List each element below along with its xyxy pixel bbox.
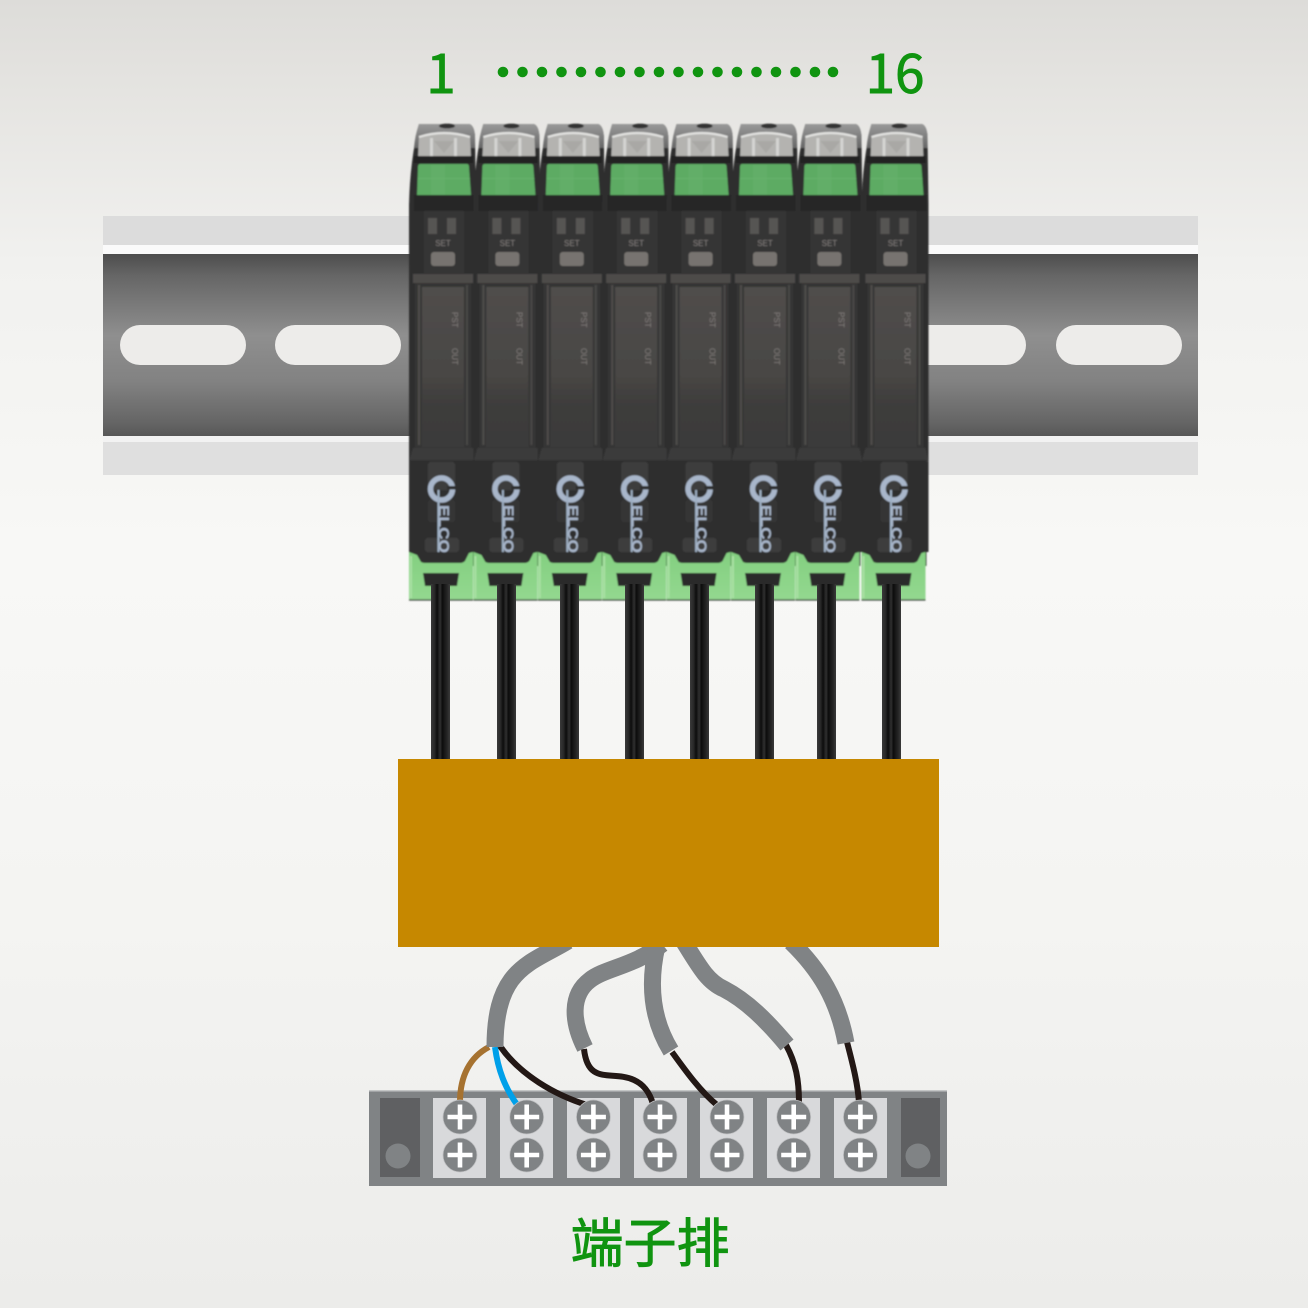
module 6: ELCO bbox=[757, 505, 774, 553]
module 8: PST bbox=[902, 312, 912, 328]
module 6: OUT bbox=[772, 348, 781, 365]
module 5: OUT bbox=[708, 348, 717, 365]
module 5 bbox=[667, 124, 734, 600]
module 7: OUT bbox=[836, 348, 845, 365]
rail slot 4 bbox=[1056, 325, 1182, 365]
caption: terminal block: 端子排 bbox=[570, 1202, 730, 1278]
module 5: PST bbox=[708, 312, 717, 328]
dotted range line bbox=[498, 67, 838, 77]
grey cable 5 bbox=[791, 942, 846, 1043]
brown wire bbox=[460, 1047, 489, 1102]
rail slot 3 bbox=[900, 325, 1026, 365]
module 7: ELCO bbox=[821, 505, 838, 553]
blue wire bbox=[495, 1047, 518, 1106]
DIN rail bbox=[103, 216, 1198, 475]
module 4: SET bbox=[628, 239, 644, 248]
black wire 5 bbox=[847, 1042, 859, 1103]
module 2: SET bbox=[500, 239, 515, 248]
module 1 bbox=[409, 124, 476, 600]
module 2: PST bbox=[514, 312, 523, 328]
label: module 1: 1 bbox=[426, 33, 456, 109]
black wire 1 bbox=[500, 1046, 587, 1105]
grey cable 2 bbox=[575, 944, 662, 1048]
module 2: OUT bbox=[514, 348, 523, 365]
module 3: ELCO bbox=[564, 505, 581, 553]
module 1: ELCO bbox=[435, 505, 452, 553]
module 7 bbox=[795, 124, 862, 600]
wires bbox=[460, 1042, 859, 1106]
module 4: PST bbox=[643, 312, 652, 328]
module 3: PST bbox=[579, 312, 588, 328]
module 3: OUT bbox=[579, 348, 588, 365]
module 7: SET bbox=[822, 239, 837, 248]
left end cap bbox=[380, 1098, 420, 1177]
module 1: OUT bbox=[450, 348, 459, 365]
rail slot 1 bbox=[120, 325, 246, 365]
module 6: PST bbox=[772, 312, 781, 328]
module 8 bbox=[862, 124, 928, 600]
module 6 bbox=[731, 124, 798, 600]
grey cables bbox=[495, 941, 846, 1051]
grey cable 3 bbox=[652, 946, 671, 1051]
module 2 bbox=[473, 124, 540, 600]
module 4: OUT bbox=[643, 348, 652, 365]
black wire 4 bbox=[786, 1045, 799, 1103]
module row bbox=[409, 124, 928, 600]
black wire 3 bbox=[672, 1052, 717, 1105]
module 8: ELCO bbox=[888, 505, 904, 553]
rail slot 2 bbox=[275, 325, 401, 365]
module 8: OUT bbox=[902, 348, 912, 365]
cables from modules bbox=[431, 584, 901, 760]
module 7: PST bbox=[836, 312, 845, 328]
module 5: SET bbox=[693, 239, 708, 248]
module 5: ELCO bbox=[693, 505, 710, 553]
label: module 16: 16 bbox=[866, 33, 924, 109]
screws bbox=[443, 1100, 877, 1172]
module 1: PST bbox=[450, 312, 459, 328]
module 3: SET bbox=[564, 239, 580, 248]
module 6: SET bbox=[757, 239, 773, 248]
grey cable 4 bbox=[684, 942, 787, 1045]
terminal block bbox=[369, 1090, 947, 1186]
module 4 bbox=[602, 124, 669, 600]
module 4: ELCO bbox=[628, 505, 645, 553]
right end cap bbox=[901, 1098, 940, 1177]
grey cable 1 bbox=[495, 941, 568, 1047]
orange cover block bbox=[398, 759, 939, 947]
module 2: ELCO bbox=[499, 505, 516, 553]
black wire 2 bbox=[584, 1049, 653, 1104]
module 1: SET bbox=[435, 239, 451, 248]
module 8: SET bbox=[888, 239, 903, 248]
module 3 bbox=[538, 124, 605, 600]
